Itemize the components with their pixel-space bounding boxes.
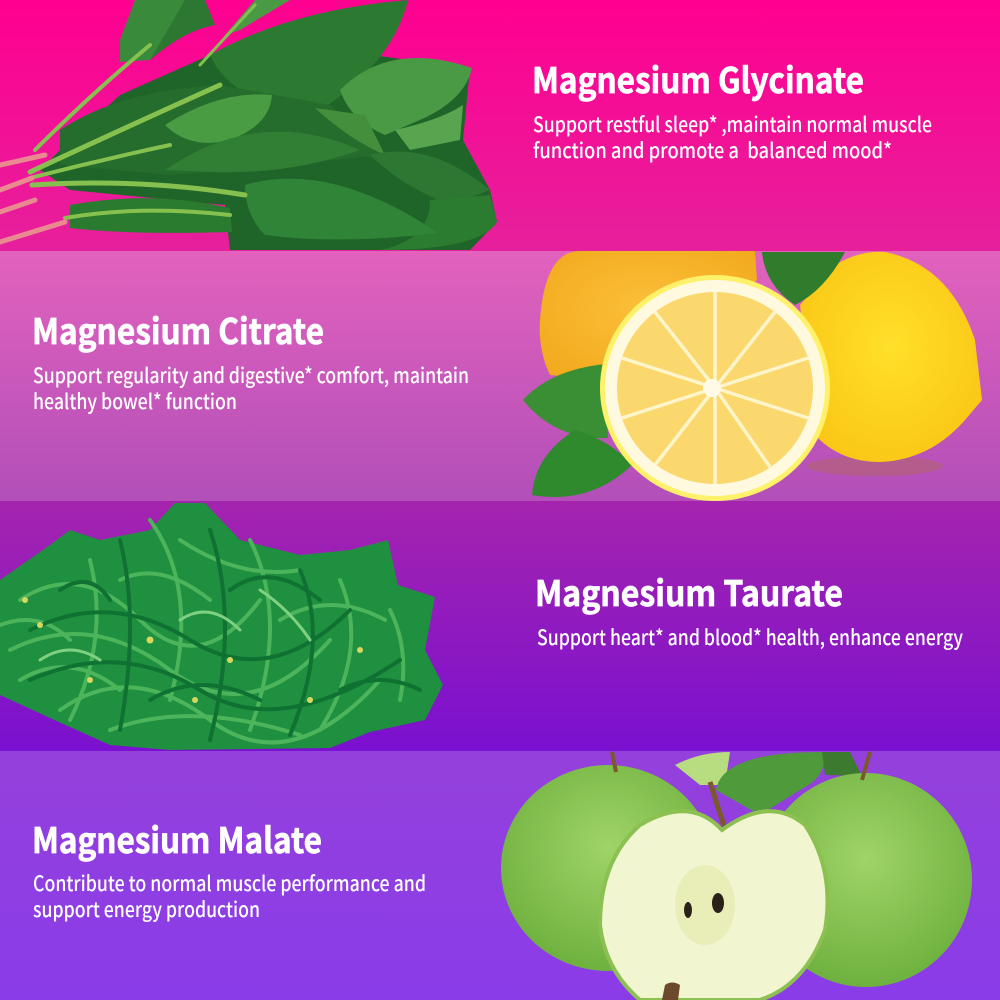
heading: Magnesium Citrate: [32, 304, 324, 355]
panel: magnesium malate: [0, 751, 1000, 1000]
heading: Magnesium Taurate: [535, 566, 843, 617]
text block: support energy production: [33, 894, 260, 924]
text block: Support regularity and digestive* comfort, maintain: [33, 360, 469, 390]
text block: Contribute to normal muscle performance and: [33, 868, 426, 898]
heading: Magnesium Malate: [32, 813, 322, 864]
panel: magnesium citrate: [0, 251, 1000, 501]
panel: magnesium glycinate: [0, 0, 1000, 251]
text block: healthy bowel* function: [33, 386, 237, 416]
icon: green apples: [501, 752, 972, 1000]
text block: function and promote a balanced mood*: [533, 135, 892, 165]
icon: seaweed salad: [0, 503, 443, 750]
heading: Magnesium Glycinate: [532, 53, 864, 104]
icon: lemons: [523, 251, 982, 501]
text block: Support restful sleep* ,maintain normal muscle: [533, 109, 932, 139]
icon: spinach bunch: [0, 0, 497, 250]
panel: magnesium taurate: [0, 501, 1000, 751]
text block: [533, 109, 932, 165]
text block: [33, 360, 469, 416]
text block: [33, 868, 426, 924]
